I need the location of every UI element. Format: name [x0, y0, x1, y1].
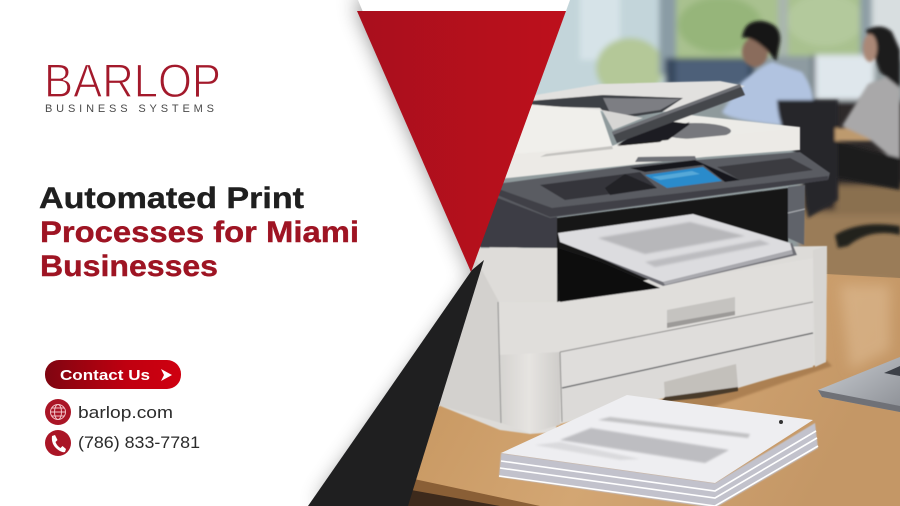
arrow icon: [161, 369, 172, 381]
office background photo: [467, 0, 900, 278]
contact button: [45, 360, 181, 389]
icon: globe: [45, 399, 71, 425]
heading: Processes for Miami: [40, 216, 359, 249]
touch screen: [645, 167, 722, 188]
people in background: [722, 21, 900, 248]
phone row: (786) 833-7781: [78, 433, 200, 452]
laptop on desk: [818, 357, 900, 412]
top white band: [357, 0, 570, 11]
paper stack: [499, 395, 818, 506]
output cavity: [557, 188, 788, 302]
phone row: [45, 430, 200, 456]
heading: Automated Print: [39, 182, 304, 215]
control panel: [490, 152, 830, 218]
icon: phone: [45, 430, 71, 456]
logo: BARLOP: [44, 55, 221, 108]
heading: [39, 182, 359, 283]
website row: barlop.com: [78, 403, 173, 422]
document feeder tray: [612, 84, 745, 146]
panel edge shadow: [310, 0, 471, 502]
printer: [438, 81, 830, 434]
scanner body: [490, 81, 800, 180]
drawer handle: [667, 297, 735, 328]
right post: [788, 185, 805, 245]
website row: [45, 399, 173, 425]
white left panel: [0, 0, 471, 506]
contact button: Contact Us: [60, 367, 150, 384]
output paper: [558, 214, 797, 286]
printer lower body: [438, 240, 827, 434]
left column: [470, 180, 557, 248]
red triangle: [357, 11, 566, 272]
black triangle: [308, 260, 484, 506]
wooden desk: [400, 274, 900, 506]
logo: BUSINESS SYSTEMS: [45, 103, 214, 115]
heading: Businesses: [40, 250, 218, 283]
